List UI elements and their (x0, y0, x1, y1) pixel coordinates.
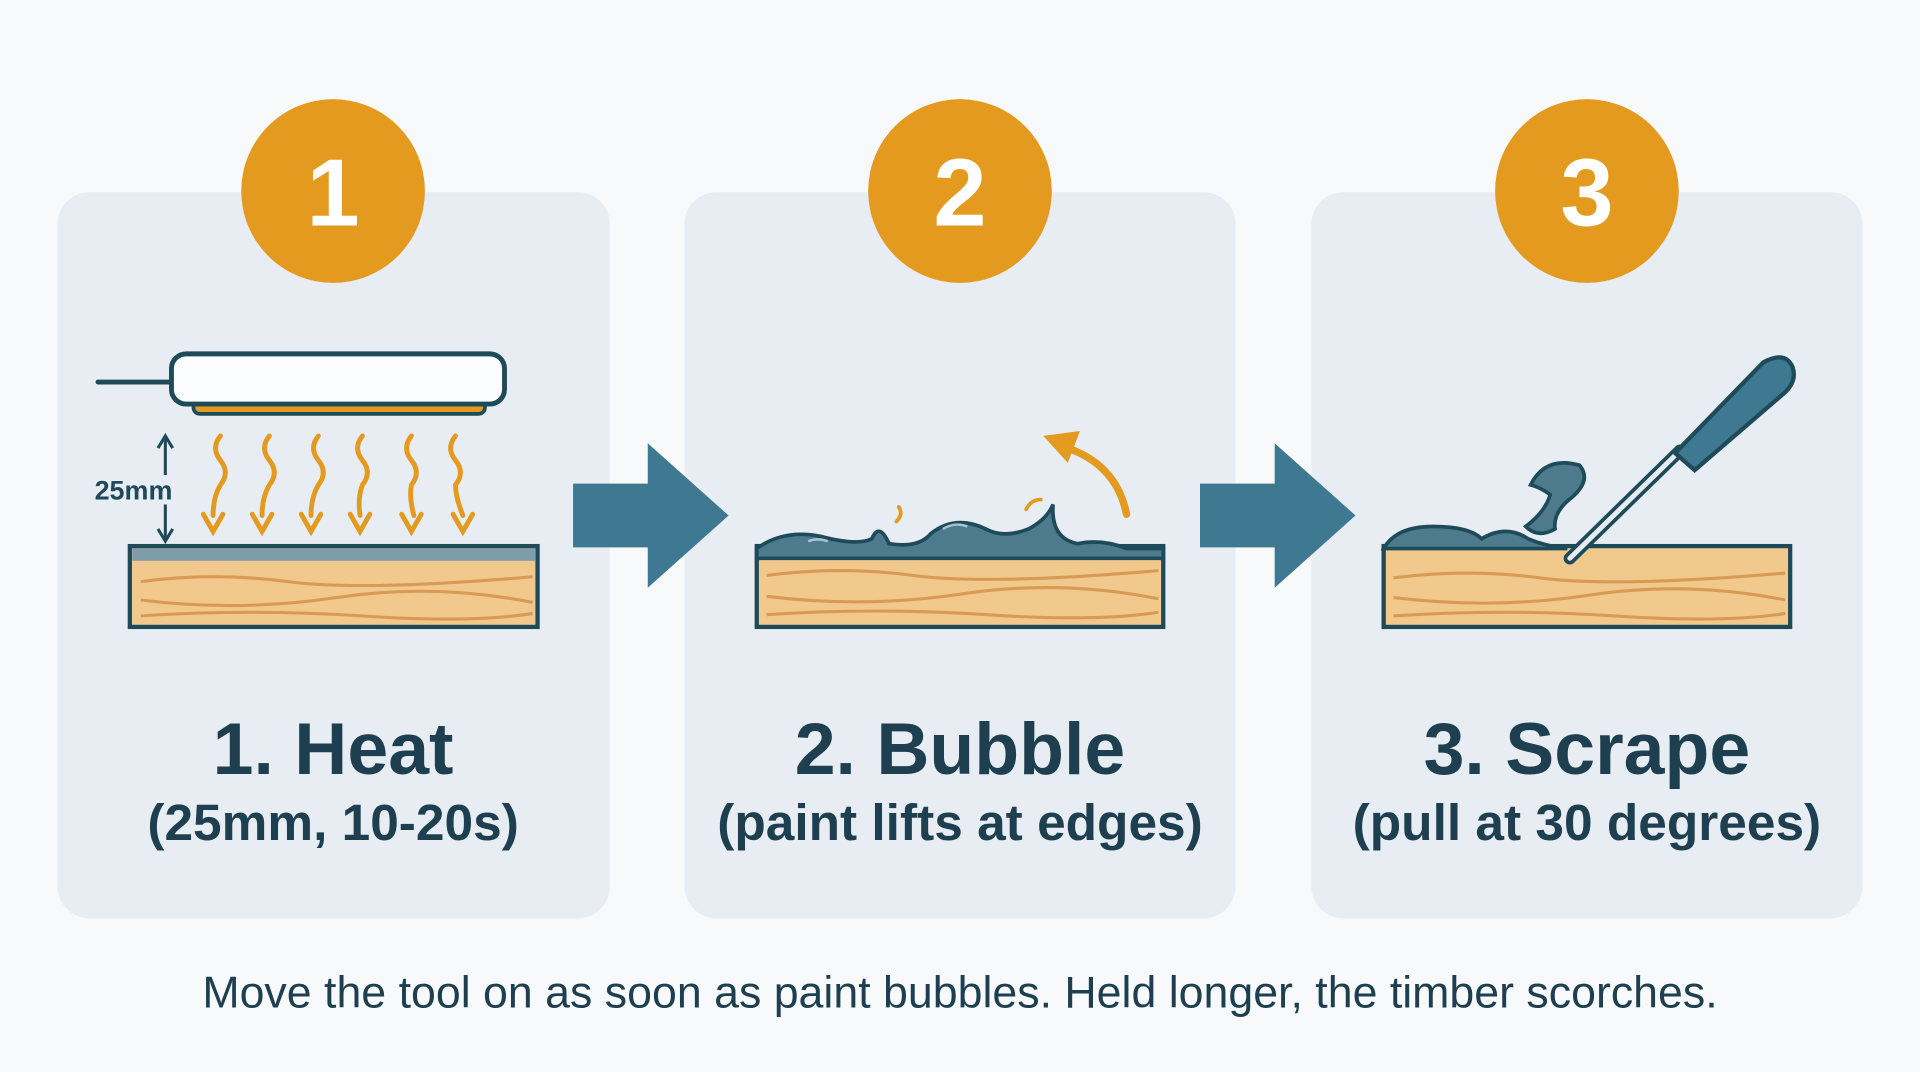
badge 1 (241, 99, 425, 283)
badge 3 (1495, 99, 1679, 283)
panel: step 1 heat (58, 99, 610, 918)
heading: 1. Heat (213, 707, 454, 790)
icon: wood board with bubbled paint (757, 500, 1163, 627)
icon: heat waves (203, 436, 473, 531)
icon: wood board (130, 546, 538, 627)
icon: scraper (1526, 357, 1794, 558)
panel: step 2 bubble (685, 99, 1235, 918)
subheading: (pull at 30 degrees) (1353, 793, 1821, 851)
subheading: (paint lifts at edges) (717, 793, 1203, 851)
dimension: 25mm (83, 436, 181, 541)
icon: lift arrow (1043, 431, 1127, 514)
arrow 2 (1200, 443, 1355, 588)
arrow 1 (573, 443, 729, 588)
badge 2 (868, 99, 1052, 283)
badge 2: 2 (933, 140, 987, 246)
panel: step 3 scrape (1311, 99, 1862, 918)
badge 3: 3 (1560, 140, 1613, 246)
footer caption: Move the tool on as soon as paint bubbles. Held longer, the timber scorches. (202, 969, 1718, 1018)
icon: wood board with paint (1384, 527, 1790, 627)
dimension: 25mm: 25mm (95, 476, 172, 506)
badge 1: 1 (307, 140, 360, 246)
icon: heat gun (98, 354, 505, 414)
heading: 2. Bubble (795, 707, 1125, 790)
heading: 3. Scrape (1424, 707, 1750, 790)
subheading: (25mm, 10-20s) (147, 793, 519, 851)
